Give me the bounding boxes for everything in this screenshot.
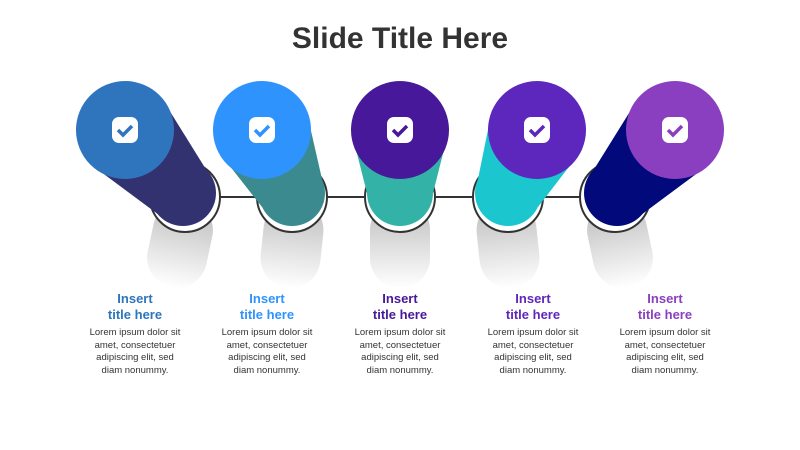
text 3: title here	[373, 307, 427, 322]
text 3: Lorem ipsum dolor sit amet, consectetuer adipiscing elit, sed diam nonummy.	[355, 327, 445, 376]
text 4: title here	[506, 307, 560, 322]
text 2	[222, 291, 312, 376]
diagram	[76, 81, 724, 282]
text 4	[488, 291, 578, 376]
item 3	[351, 81, 449, 226]
text 2: Lorem ipsum dolor sit amet, consectetuer adipiscing elit, sed diam nonummy.	[222, 327, 312, 376]
text 5: Insert	[647, 291, 683, 306]
text 5	[620, 291, 710, 376]
item 5	[584, 81, 724, 226]
text 5: title here	[638, 307, 692, 322]
shadows	[142, 195, 658, 293]
connector line	[185, 196, 615, 198]
text 2: title here	[240, 307, 294, 322]
text 3	[355, 291, 446, 376]
text 4: Insert	[515, 291, 551, 306]
text 1: title here	[108, 307, 162, 322]
text 2: Insert	[249, 291, 285, 306]
text 5: Lorem ipsum dolor sit amet, consectetuer adipiscing elit, sed diam nonummy.	[620, 327, 710, 376]
item 2	[213, 81, 325, 226]
item 1	[76, 81, 216, 226]
rings	[150, 162, 650, 232]
text 1	[90, 291, 180, 376]
title: Slide Title Here	[292, 22, 508, 55]
text 4: Lorem ipsum dolor sit amet, consectetuer adipiscing elit, sed diam nonummy.	[488, 327, 578, 376]
text 1: Insert	[117, 291, 153, 306]
item 4	[475, 81, 586, 226]
text 3: Insert	[382, 291, 418, 306]
text 1: Lorem ipsum dolor sit amet, consectetuer adipiscing elit, sed diam nonummy.	[90, 327, 180, 376]
